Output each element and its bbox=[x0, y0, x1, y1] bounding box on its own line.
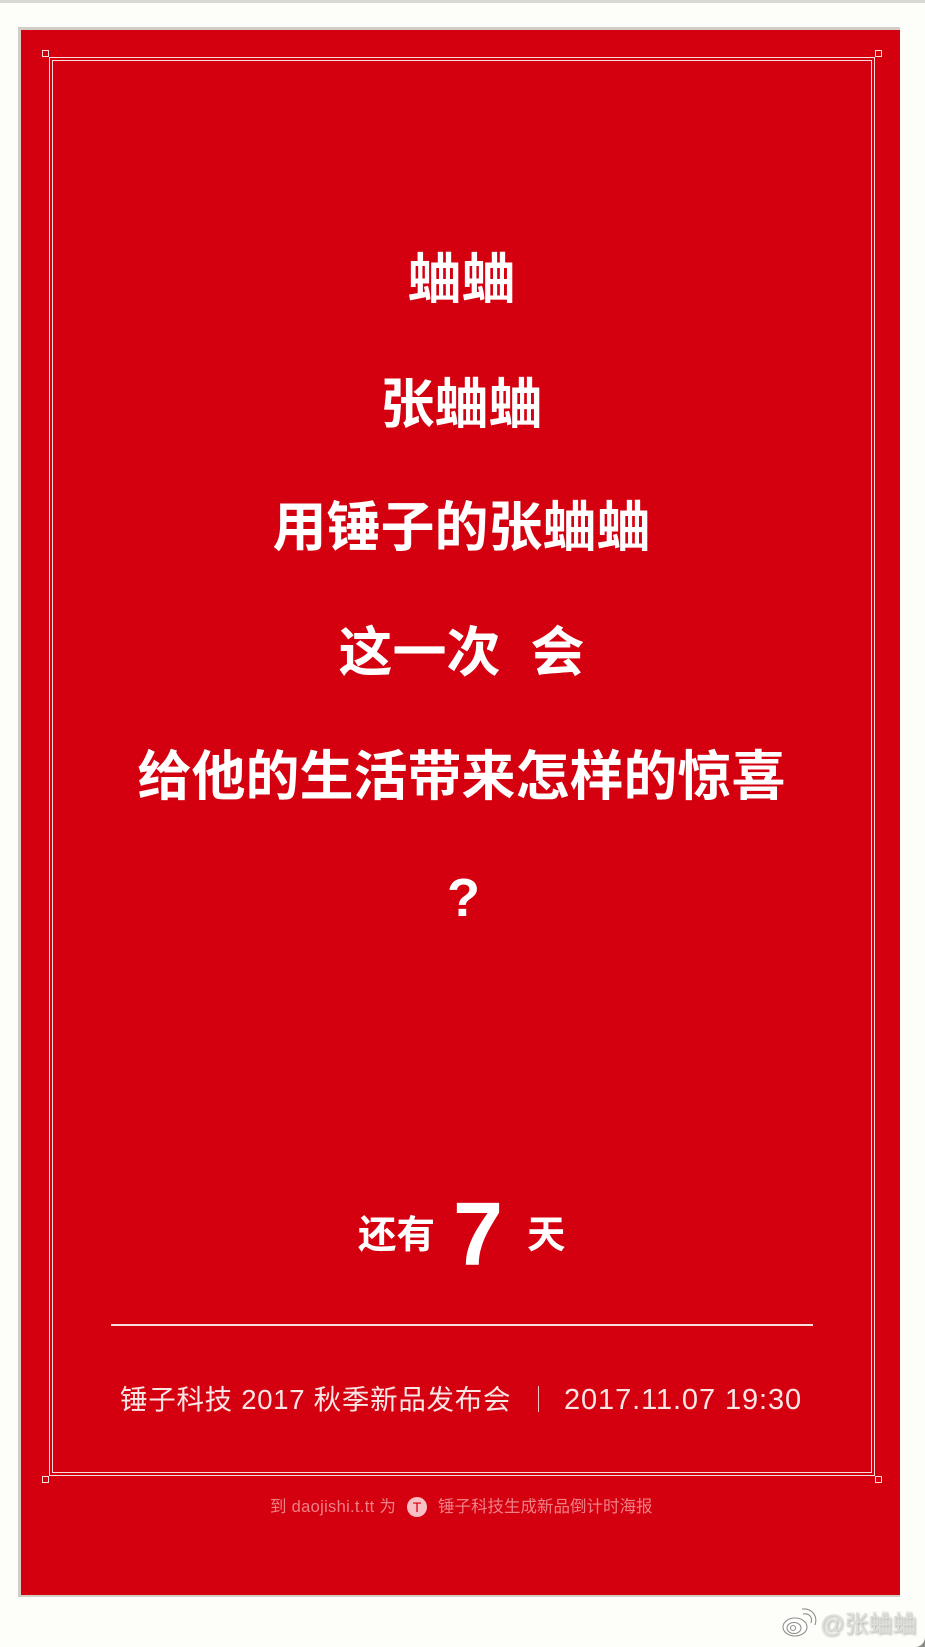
footer note bbox=[270, 1497, 652, 1517]
headline line 5: 给他的生活带来怎样的惊喜 bbox=[138, 747, 786, 807]
icon: T logo bbox=[407, 1497, 427, 1517]
countdown label: days left bbox=[358, 1185, 566, 1285]
top grey edge bbox=[0, 0, 925, 3]
headline line 4: 这一次 会 bbox=[338, 623, 584, 683]
frame: double border bbox=[42, 50, 882, 1483]
page corner bbox=[915, 1637, 925, 1647]
headline line 6: question mark: ? bbox=[447, 868, 480, 928]
event name: 锤子科技 2017 秋季新品发布会 bbox=[120, 1384, 511, 1415]
watermark: weibo username: @张蛐蛐 bbox=[820, 1611, 916, 1638]
icon: T logo: T bbox=[413, 1499, 421, 1515]
footer note: 到 daojishi.t.tt 为 bbox=[270, 1498, 396, 1516]
footer note: 锤子科技生成新品倒计时海报 bbox=[438, 1498, 652, 1516]
countdown label: days left: 天 bbox=[527, 1214, 566, 1257]
countdown number: 7 bbox=[453, 1185, 503, 1285]
headline line 3: 用锤子的张蛐蛐 bbox=[272, 498, 650, 558]
event date: 2017.11.07 19:30 bbox=[564, 1384, 802, 1416]
separator bbox=[538, 1386, 539, 1412]
horizontal divider bbox=[111, 1324, 813, 1326]
countdown label: days left: 还有 bbox=[358, 1214, 435, 1257]
headline line 1: 蛐蛐 bbox=[408, 250, 516, 310]
icon: weibo logo bbox=[782, 1608, 816, 1636]
headline line 2: 张蛐蛐 bbox=[380, 375, 542, 435]
